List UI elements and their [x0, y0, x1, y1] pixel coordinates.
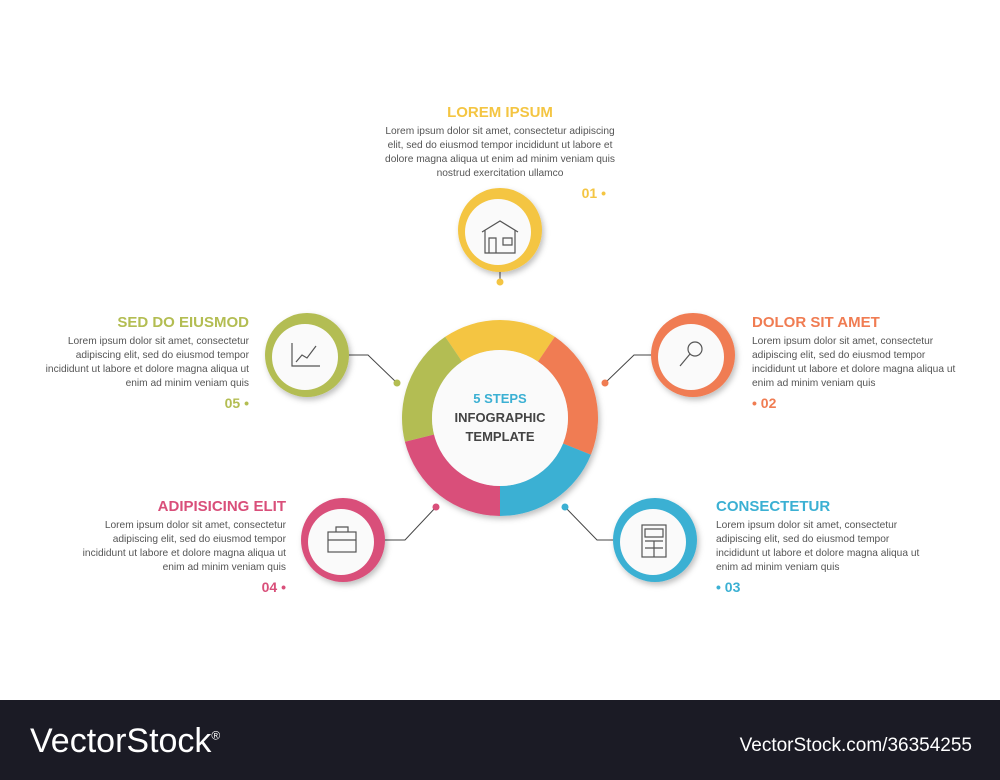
text: 02: Lorem ipsum dolor sit amet, consectetur adipiscing elit, sed do eiusmod tempor incididunt ut labore et dolore magna aliqua ut enim ad minim veniam quis	[752, 336, 955, 389]
text: 03: • 03	[716, 579, 740, 595]
text: 03: CONSECTETUR	[716, 498, 830, 515]
text: 02: • 02	[752, 395, 776, 411]
step circles	[265, 188, 735, 582]
text: 01	[385, 104, 615, 201]
text: 05	[46, 314, 249, 411]
connectors	[349, 272, 651, 540]
text: 01: LOREM IPSUM	[447, 104, 553, 121]
center text: TEMPLATE	[465, 429, 535, 444]
text: 04	[83, 498, 286, 595]
center text: 5 STEPS	[473, 391, 527, 406]
text: 04: 04 •	[262, 579, 286, 595]
text: 04: ADIPISICING ELIT	[158, 498, 286, 515]
text: 05: SED DO EIUSMOD	[117, 314, 249, 331]
footer logo: VectorStock®	[30, 722, 220, 760]
ring	[402, 320, 598, 516]
icons	[292, 221, 702, 557]
center text: INFOGRAPHIC	[454, 410, 546, 425]
text: 03: Lorem ipsum dolor sit amet, consectetur adipiscing elit, sed do eiusmod tempor incididunt ut labore et dolore magna aliqua ut enim ad minim veniam quis	[716, 520, 919, 573]
text: 03	[716, 498, 920, 595]
text: 01: Lorem ipsum dolor sit amet, consectetur adipiscing elit, sed do eiusmod tempor incididunt ut labore et dolore magna aliqua ut enim ad minim veniam quis nostrud exercitation ullamco	[385, 126, 615, 179]
footer bar	[0, 700, 1000, 780]
text: 05: 05 •	[225, 395, 249, 411]
text: 05: Lorem ipsum dolor sit amet, consectetur adipiscing elit, sed do eiusmod tempor incididunt ut labore et dolore magna aliqua ut enim ad minim veniam quis	[46, 336, 249, 389]
text: 02: DOLOR SIT AMET	[752, 314, 880, 331]
text: 01: 01 •	[582, 185, 606, 201]
text: 04: Lorem ipsum dolor sit amet, consectetur adipiscing elit, sed do eiusmod tempor incididunt ut labore et dolore magna aliqua ut enim ad minim veniam quis	[83, 520, 286, 573]
center text	[454, 391, 546, 444]
text: 02	[752, 314, 956, 411]
footer url: VectorStock.com/36354255	[740, 735, 972, 756]
